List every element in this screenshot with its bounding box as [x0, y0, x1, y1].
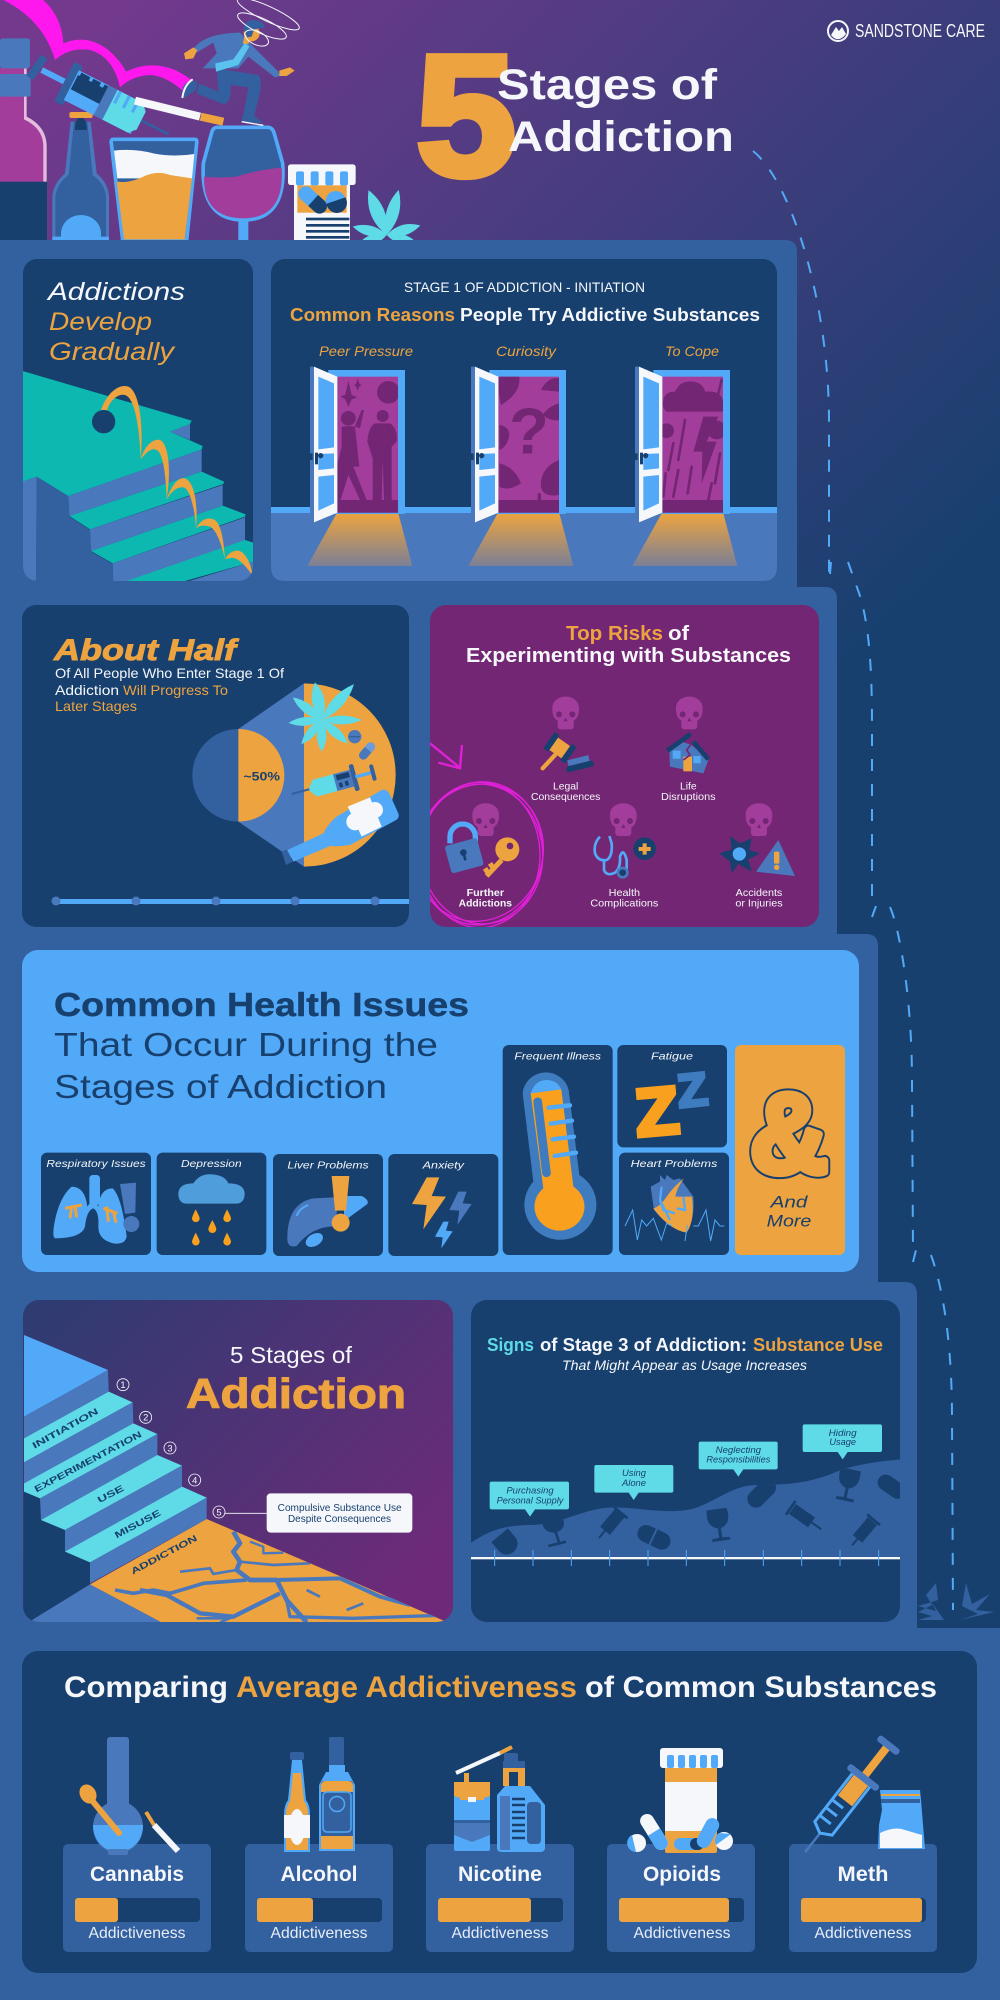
card: alcohol	[245, 1737, 393, 1952]
card: cannabis: Addictiveness	[88, 1925, 186, 1942]
risk labels: Health	[609, 888, 640, 899]
floor cracks	[115, 1532, 448, 1622]
risk labels: Life	[680, 781, 697, 792]
staircase diagram	[23, 1335, 450, 1623]
wine bottle	[0, 38, 47, 240]
stage labels: MISUSE	[113, 1508, 162, 1540]
heading: Top Risks	[566, 623, 663, 645]
running figure	[182, 0, 302, 125]
beer bottle	[52, 112, 109, 240]
stage labels: EXPERIMENTATION	[33, 1429, 143, 1494]
card: frequent illness: Frequent Illness	[514, 1052, 601, 1063]
panel: signs of stage 3	[471, 1300, 909, 1622]
syringe	[288, 759, 378, 808]
heading	[487, 1335, 883, 1355]
card: and more: More	[767, 1212, 811, 1231]
subheading: That Might Appear as Usage Increases	[562, 1357, 807, 1373]
heading: Addictions	[46, 278, 185, 306]
card: depression	[157, 1153, 266, 1255]
heading: People Try Addictive Substances	[460, 305, 760, 325]
heading: of Stage 3 of Addiction:	[540, 1335, 747, 1355]
risk labels: Addictions	[459, 899, 512, 910]
card: fatigue: Z	[675, 1063, 710, 1118]
title: 5 Stages of Addiction: Stages of	[497, 61, 718, 109]
icon: beer bottle and whiskey	[284, 1737, 355, 1852]
illustration: 50 percent magnified	[192, 680, 399, 867]
card: cannabis: Cannabis	[90, 1863, 184, 1886]
card: depression: Depression	[181, 1159, 242, 1170]
callout: Despite Consequences	[288, 1514, 391, 1525]
icon: gavel	[543, 732, 594, 773]
card: meth: Addictiveness	[814, 1925, 912, 1942]
skulls	[472, 697, 772, 836]
card: and more: &	[750, 1071, 828, 1198]
title: 5 Stages of Addiction: Addiction	[508, 113, 734, 161]
icon: broken house	[667, 734, 708, 773]
staircase diagram: 4	[192, 1475, 197, 1485]
card: cannabis	[63, 1737, 211, 1952]
card: liver problems: Liver Problems	[287, 1161, 369, 1172]
door: curiosity	[468, 367, 573, 566]
card: and more	[735, 1045, 845, 1255]
heading: of	[668, 623, 689, 645]
risk labels: or Injuries	[735, 899, 783, 910]
bottle	[282, 790, 399, 865]
icon: cigarettes and vape	[454, 1747, 545, 1852]
heading	[64, 1671, 937, 1704]
staircase with bouncing ball	[23, 371, 253, 583]
door labels: Peer Pressure	[319, 343, 413, 359]
card: fatigue	[617, 1045, 727, 1151]
panel: 5 stages of addiction staircase: Addiction	[186, 1370, 406, 1417]
heading: Substance Use	[753, 1335, 883, 1355]
card: heart problems	[619, 1153, 729, 1255]
wine glass	[203, 127, 283, 240]
door: curiosity: ?	[509, 394, 549, 467]
icon: lock and key	[444, 824, 519, 876]
panel: common health issues	[22, 950, 859, 1272]
card: alcohol: Alcohol	[280, 1863, 358, 1886]
substance silhouettes	[491, 1467, 909, 1559]
card: opioids: Addictiveness	[634, 1925, 730, 1942]
highlight scribble	[430, 742, 544, 927]
heading: Stages of Addiction	[54, 1068, 387, 1105]
card: nicotine	[426, 1747, 574, 1952]
staircase diagram: 5	[216, 1507, 222, 1517]
staircase diagram: 1	[120, 1380, 126, 1390]
callout: using alone	[594, 1465, 673, 1500]
row of small cards	[41, 1153, 498, 1256]
beer glass	[111, 139, 197, 240]
heading: About Half	[53, 634, 240, 667]
door labels	[319, 343, 719, 359]
stage labels: ADDICTION	[129, 1533, 199, 1576]
cigarette	[135, 101, 223, 122]
icon: pill bottle and pills	[627, 1748, 733, 1853]
panel: addictions develop gradually	[23, 259, 253, 583]
magenta trail	[3, 0, 192, 91]
numbered markers	[117, 1379, 267, 1518]
card: heart problems: Heart Problems	[631, 1159, 717, 1170]
staircase diagram: 3	[167, 1443, 173, 1453]
header illustration: substances and running figure	[0, 0, 422, 249]
heading: STAGE 1 OF ADDICTION - INITIATION	[404, 279, 645, 295]
cannabis leaf	[351, 188, 422, 249]
risk labels: Consequences	[531, 792, 601, 803]
callout: neglecting responsibilities	[699, 1442, 778, 1477]
heading: Experimenting with Substances	[466, 645, 791, 667]
card: frequent illness	[503, 1045, 613, 1255]
heading: 5 Stages of	[230, 1342, 353, 1368]
right cards	[503, 1045, 845, 1255]
card: respiratory issues: Respiratory Issues	[46, 1159, 146, 1170]
callout: purchasing personal supply: Purchasing	[506, 1485, 554, 1495]
heading	[466, 623, 791, 667]
heading: Comparing	[64, 1671, 228, 1704]
heading	[46, 278, 185, 366]
syringe	[22, 45, 178, 154]
card: opioids	[607, 1748, 755, 1952]
card: meth: Meth	[838, 1863, 888, 1886]
stage labels: USE	[96, 1483, 125, 1505]
description	[55, 665, 284, 714]
heading	[54, 986, 469, 1105]
panel: about half	[22, 605, 409, 927]
panel: 5 stages of addiction staircase	[23, 1300, 453, 1623]
heading: of Common Substances	[585, 1671, 937, 1704]
stage labels: INITIATION	[30, 1406, 100, 1451]
heading: Common Reasons	[290, 305, 455, 325]
heading: That Occur During the	[54, 1026, 438, 1063]
card: nicotine: Nicotine	[458, 1863, 542, 1886]
title: 5 Stages of Addiction	[416, 20, 734, 212]
illustration: 50 percent magnified: ~50%	[243, 769, 280, 783]
risk labels	[459, 781, 783, 910]
card: respiratory issues	[41, 1153, 151, 1255]
heading: Average Addictiveness	[236, 1671, 577, 1704]
callout: neglecting responsibilities: Neglecting	[716, 1445, 761, 1455]
callout: using alone: Using	[622, 1468, 646, 1478]
card: fatigue: Z	[632, 1074, 682, 1151]
icon: stethoscope and plus	[595, 836, 656, 877]
card: and more: &	[750, 1071, 828, 1198]
panel: stage 1 initiation	[271, 259, 777, 581]
heading	[290, 279, 760, 325]
panel: comparing average addictiveness	[22, 1651, 977, 1973]
callout: hiding usage	[803, 1424, 882, 1459]
door labels: Curiosity	[496, 343, 557, 359]
risk labels: Further	[467, 888, 504, 899]
description: Addiction	[55, 682, 119, 698]
callout: purchasing personal supply: Personal Supply	[497, 1495, 564, 1505]
title: 5 Stages of Addiction: 5	[416, 20, 516, 212]
heading: Develop	[49, 308, 152, 336]
heading: Common Health Issues	[54, 986, 469, 1023]
risk labels: Complications	[590, 899, 659, 910]
heading: Gradually	[49, 338, 176, 366]
stage labels	[30, 1406, 199, 1576]
description: Of All People Who Enter Stage 1 Of	[55, 665, 284, 681]
callout: purchasing personal supply	[490, 1482, 569, 1517]
card: liver problems	[273, 1154, 383, 1256]
door: peer pressure	[307, 367, 412, 566]
icon: explosion and warning	[719, 836, 795, 876]
callout: hiding usage: Usage	[829, 1437, 856, 1447]
icon: syringe and bag	[790, 1731, 925, 1864]
risk labels: Disruptions	[661, 792, 716, 803]
panel: top risks	[430, 605, 819, 927]
icon: bong and joint	[76, 1737, 178, 1855]
description: Later Stages	[55, 698, 137, 714]
pill bottle	[288, 164, 356, 240]
risk labels: Accidents	[736, 888, 783, 899]
card: opioids: Opioids	[643, 1863, 721, 1886]
risk labels: Legal	[553, 781, 578, 792]
callout: using alone: Alone	[621, 1478, 646, 1488]
icon: burst marks at end of path	[918, 1583, 994, 1620]
staircase diagram: 2	[143, 1413, 148, 1423]
rising wave timeline	[471, 1424, 909, 1566]
card: anxiety	[388, 1154, 498, 1256]
description: Will Progress To	[123, 682, 228, 698]
dashed path arrow	[753, 151, 953, 1610]
card: fatigue: Fatigue	[651, 1052, 693, 1063]
card: and more: And	[769, 1193, 808, 1212]
callout: neglecting responsibilities: Responsibilities	[706, 1455, 771, 1465]
callout	[267, 1493, 412, 1533]
card: anxiety: Anxiety	[421, 1161, 465, 1172]
callout: hiding usage: Hiding	[829, 1428, 857, 1438]
door: to cope	[632, 367, 737, 566]
heading: Signs	[487, 1335, 534, 1355]
card: meth	[789, 1731, 937, 1952]
card: alcohol: Addictiveness	[270, 1925, 368, 1942]
card: nicotine: Addictiveness	[452, 1925, 548, 1942]
callout: Compulsive Substance Use	[278, 1503, 402, 1514]
timeline	[52, 896, 409, 906]
door labels: To Cope	[665, 343, 719, 359]
